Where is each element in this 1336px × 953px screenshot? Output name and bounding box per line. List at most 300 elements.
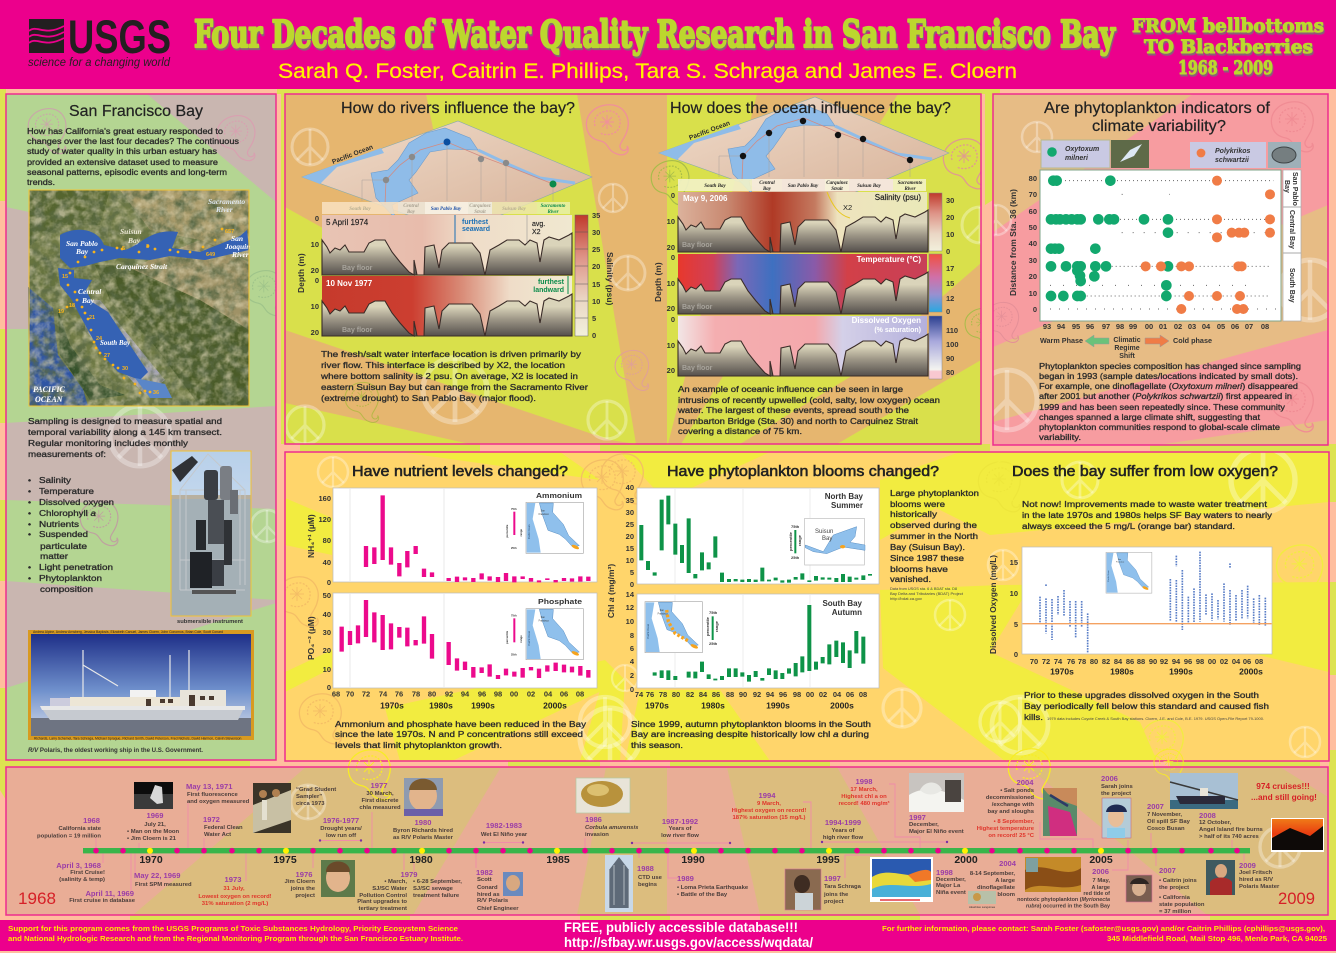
timeline axis [83, 848, 1250, 866]
event: 2006 red tide: rubra) occurred in the South Bay [1026, 904, 1110, 910]
event: April 11 1969 [69, 889, 136, 904]
bloom axis labels: 00 [806, 690, 814, 699]
bloom axis labels: 78 [659, 690, 667, 699]
ocean station labels: Sacramento [898, 181, 923, 186]
heading: climate variability? [1092, 118, 1226, 135]
sampling text: Regular monitoring includes monthly [28, 438, 189, 448]
event: 1989: • Battle of the Bay [677, 892, 728, 898]
section chart: dissolved oxygen: (% saturation) [874, 327, 921, 334]
event: 1988 CTD: begins [638, 882, 658, 888]
event: 1994-1999: Years of [832, 828, 854, 834]
event: 1998 March: 1998 [856, 777, 872, 786]
photo: R/V Polaris: Richards, Larry Schemel, Tara Schraga, Michael Sprague, Richard Smith, David Peterson, Fred Nichols, David Harmon, Calvin Stevenson [34, 736, 242, 740]
nutrient axis labels: 78 [412, 690, 420, 698]
river station labels: River [547, 210, 559, 215]
nutrient axis labels: 08 [576, 690, 584, 698]
event: 1979: Plant upgrades to [357, 899, 407, 905]
ocean text: covering a distance of 75 km. [678, 426, 802, 436]
event: 1972: 1972 [203, 815, 220, 824]
event: 1979: tertiary treatment [359, 906, 407, 912]
ocean depth axis: 0 [671, 315, 675, 324]
sampling text: measurements of: [28, 449, 106, 459]
oxygen lower text: Bay periodically fell below this standard and caused fish [1024, 701, 1269, 711]
phytoplankton text: phytoplankton communities respond to global-scale climate [1039, 422, 1280, 432]
bar chart: North Bay summer: 10 [626, 556, 634, 565]
river text: The fresh/salt water interface location is driven primarily by [321, 349, 582, 359]
ocean colour bars: 100 [946, 340, 959, 349]
bloom axis labels: 96 [779, 690, 787, 699]
dot chart axes: 40 [1029, 239, 1037, 248]
heading: Have phytoplankton blooms changed? [667, 464, 939, 480]
bloom axis labels: 02 [819, 690, 827, 699]
bar chart: North Bay summer: Suisun [815, 529, 833, 535]
monitoring list: Phytoplankton [39, 573, 102, 583]
event: 1989: • Loma Prieta Earthquake [677, 885, 749, 891]
event: 1973 [198, 875, 272, 907]
ocean depth axis [653, 191, 675, 375]
bloom side text: http://bdat.ca.gov [890, 597, 922, 601]
bar chart: phosphate: 20 [323, 646, 331, 655]
nutrient text: levels that limit phytoplankton growth. [335, 740, 502, 750]
event: 2009 Joel Fritsch [1206, 860, 1280, 895]
salinity colour bar: 10 [592, 297, 600, 306]
bloom side text: observed during the [890, 520, 977, 530]
timeline axis: 1985 [546, 854, 570, 866]
event: 1968 population: 1968 [83, 816, 100, 825]
bay region key [1283, 170, 1301, 321]
nutrient axis labels: 74 [379, 690, 388, 698]
scatter chart: dissolved oxygen: 92 [1160, 657, 1168, 666]
satellite map: 5 [122, 246, 125, 252]
section chart: salinity May 9 2006: Salinity (psu) [875, 193, 921, 202]
bar chart: North Bay summer: 25th [791, 555, 800, 560]
callout: cruises: ...and still going! [1251, 792, 1317, 802]
heading: San Francisco Bay [69, 103, 203, 120]
event: 1980 Byron Richards: 1980 [415, 818, 431, 827]
event: 2004 salt ponds: Highest temperature [977, 826, 1035, 832]
bloom axis labels [606, 564, 867, 710]
phytoplankton text [1039, 361, 1301, 442]
ocean text: Dumbarton Bridge (Sta. 30) and north to Carquinez Strait [678, 416, 919, 426]
bar chart: South Bay autumn: 6 [630, 644, 634, 653]
ocean text: An example of oceanic influence can be seen in large [678, 384, 903, 394]
bar chart: North Bay summer: 15 [626, 544, 634, 553]
bloom side text: blooms were [890, 499, 945, 509]
dot chart axes: 80 [1029, 174, 1037, 183]
bloom axis labels: 1990s [766, 700, 790, 710]
monitoring list: • [28, 573, 31, 583]
depth axis [296, 214, 319, 337]
satellite map: 24 [96, 336, 103, 342]
event: 1979 [357, 870, 462, 912]
bar chart: North Bay summer: 5 [630, 568, 634, 577]
ocean colour bars [929, 193, 959, 379]
climatic regime arrows: Cold phase [1173, 338, 1212, 345]
nutrient axis labels: 96 [478, 690, 486, 698]
event: 1968 population: population = 19 million [37, 834, 101, 840]
bar chart: South Bay autumn [626, 590, 879, 694]
bar chart: North Bay summer: North Bay [825, 492, 864, 501]
dot chart axes: 07 [1245, 322, 1253, 331]
event: April 3 1968: First Cruise! [70, 870, 105, 876]
event: May 13 1971 [186, 782, 250, 805]
event: 2007 Caitrin: the project [1159, 885, 1189, 891]
event: 2008 [1170, 773, 1264, 840]
phytoplankton text: after 2001 but another ( Polykrikos schwartzii ) first appeared in [1039, 391, 1292, 401]
scatter chart: dissolved oxygen [988, 547, 1272, 676]
bar chart: South Bay autumn: 75th [709, 610, 718, 615]
monitoring list [28, 475, 114, 594]
bar chart: phosphate [306, 591, 597, 692]
climatic regime arrows: Warm Phase [1040, 338, 1083, 345]
bloom axis labels: 06 [846, 690, 854, 699]
bloom side text: Data from USGS sta. 6 & BDAT sta. D8 [890, 587, 957, 591]
bloom axis labels: 82 [686, 690, 694, 699]
satellite map: River [231, 250, 249, 259]
scatter chart: dissolved oxygen: 80 [1090, 657, 1098, 666]
event: grad student sampler: circa 1973 [296, 801, 325, 807]
satellite map: 36 [153, 390, 159, 396]
monitoring list: composition [40, 584, 93, 594]
river station labels [322, 202, 570, 215]
satellite map: Bay [81, 296, 95, 305]
dot chart axes: 0 [1033, 305, 1037, 314]
event: May 22 1969: May 22, 1969 [134, 871, 180, 880]
climatic regime arrows: Shift [1119, 353, 1135, 360]
event: April 3 1968: April 3, 1968 [56, 861, 101, 870]
depth axis: 0 [315, 214, 319, 223]
nutrient axis labels: 06 [560, 690, 568, 698]
USGS logo [28, 10, 171, 69]
timeline axis: 1975 [273, 854, 297, 866]
ocean colour bars: 10 [946, 230, 954, 239]
salinity colour bar: 5 [592, 314, 596, 323]
dot chart axes: 50 [1029, 223, 1037, 232]
nutrient axis labels: 98 [494, 690, 502, 698]
event: 1977: First discrete [362, 798, 399, 804]
phytoplankton text: 1999 and has been seen repeatedly since. These community [1039, 402, 1286, 412]
nutrient axis labels: 2000s [543, 700, 567, 710]
section chart: 5 April 1974: seaward [462, 226, 490, 233]
salinity colour bar [575, 211, 615, 340]
nutrient axis labels [332, 690, 584, 710]
bar chart: South Bay autumn: 12 [626, 603, 634, 612]
event: 1969 moon [127, 782, 180, 842]
event: 1976-1977 drought: low run off [326, 833, 356, 839]
bar chart: South Bay autumn: South Bay [822, 599, 863, 608]
ocean station labels: San Pablo Bay [788, 184, 819, 189]
event: 2006 Sarah [1101, 774, 1133, 838]
phytoplankton text: began in 1993 (sample dates/locations indicated by small dots). [1039, 371, 1298, 381]
event: 1972 [203, 815, 243, 838]
river station labels: Strait [474, 210, 486, 215]
monitoring list: Suspended [39, 529, 88, 539]
scatter chart: dissolved oxygen: 76 [1067, 657, 1075, 666]
event: 1982-1983 [481, 821, 528, 838]
event: 2009 Joel Fritsch: hired as R/V [1239, 877, 1273, 883]
event: 1987-1992: 1987-1992 [662, 817, 698, 826]
event: 2006 Sarah: the project [1101, 791, 1131, 797]
event: 2008: 12 October, [1199, 820, 1231, 826]
bar chart: ammonium [306, 488, 597, 587]
event: 1980 Byron Richards: Byron Richards hired [393, 828, 453, 834]
monitoring list: • [28, 486, 31, 496]
river text: (extreme drought) to San Pablo Bay (major flood). [321, 393, 536, 403]
timeline axis: 2005 [1089, 854, 1113, 866]
ocean colour bars: 80 [946, 368, 954, 377]
event: 1998 December: 1998 [936, 868, 953, 877]
ocean depth axis: 10 [667, 217, 675, 226]
river text: eastern Suisun Bay but can range from the Sacramento River [321, 382, 588, 392]
authors: Sarah Q. Foster, Caitrin E. Phillips, Tara S. Schraga and James E. Cloern [278, 59, 1017, 83]
bar chart: ammonium: 0 [327, 578, 331, 587]
subtitle badge: TO Blackberries [1144, 36, 1313, 58]
monitoring list: Salinity [39, 475, 72, 485]
event: 1982 Scott Conard: hired as [477, 892, 500, 898]
scatter chart: dissolved oxygen: 08 [1255, 657, 1263, 666]
event: 1976 Jim Cloern [285, 860, 355, 899]
satellite map: Suisun [120, 227, 142, 236]
bloom side text: summer in the North [890, 531, 978, 541]
dot chart axes: 02 [1174, 322, 1182, 331]
phytoplankton text: For example, one dinoflagellate ( Oxytoxum milneri ) disappeared [1039, 381, 1298, 391]
bar chart: South Bay autumn: range [714, 620, 719, 632]
event: 1979: 1979 [401, 870, 417, 879]
dot chart axes: 00 [1145, 322, 1153, 331]
scatter chart: dissolved oxygen: 10 [1010, 589, 1018, 598]
bloom axis labels: 86 [712, 690, 720, 699]
bar chart: South Bay autumn: Autumn [832, 608, 862, 617]
salinity colour bar: 30 [592, 228, 600, 237]
river text: where bottom salinity is 2 psu. On average, X2 is located in [320, 371, 578, 381]
river station map: Pacific Ocean [331, 144, 374, 166]
event: 2004 salt ponds: on record! 25 °C [988, 833, 1035, 839]
satellite map: 30 [122, 366, 128, 372]
event: 1973: 31 July, [223, 886, 245, 892]
dot chart axes: 94 [1057, 322, 1066, 331]
event: May 13 1971: May 13, 1971 [186, 782, 233, 791]
photo: R/V Polaris: Andrea Alpine, Andrew Arnsberg, Jessica Baylosis, Elizabeth Canuel, James Cloern, John Conomos, Brian Cole, Scott Conard [33, 630, 223, 634]
ocean station map: Pacific Ocean [688, 120, 731, 142]
event: 2007 Caitrin: 2007 [1159, 866, 1176, 875]
event: May 13 1971: First fluorescence [187, 792, 238, 798]
event: 1976-1977 drought [320, 816, 362, 839]
phytoplankton text: Phytoplankton species composition has changed since sampling [1039, 361, 1301, 371]
bar chart: phosphate: 10 [323, 665, 331, 674]
ocean station map [659, 97, 949, 209]
salinity colour bar: 0 [592, 331, 596, 340]
event: 1997 December: Major El Niño event [909, 829, 964, 835]
bloom text: Bay are increasing despite historically low chl a during [631, 729, 869, 739]
scatter chart: dissolved oxygen: 04 [1232, 657, 1241, 666]
ocean text [677, 384, 940, 436]
bar chart: South Bay autumn: percentile [705, 616, 710, 636]
dot chart axes: 70 [1029, 190, 1037, 199]
scatter chart: dissolved oxygen: 84 [1114, 657, 1123, 666]
dot chart axes: 10 [1029, 289, 1037, 298]
depth axis: 0 [315, 276, 319, 285]
scatter chart: dissolved oxygen: 88 [1137, 657, 1145, 666]
oxygen lower text [1024, 690, 1269, 722]
dot chart axes: 30 [1029, 256, 1037, 265]
event: 1982-1983: 1982-1983 [486, 821, 522, 830]
bloom axis labels: 90 [739, 690, 747, 699]
intro text: changes over the last four decades? The continuous [27, 136, 240, 146]
event: 2009 Joel Fritsch: Joel Fritsch [1239, 870, 1272, 876]
event: 2007 Cosco Busan: Cosco Busan [1147, 826, 1185, 832]
database link: http://sfbay.wr.usgs.gov/access/wqdata/ [564, 935, 813, 950]
nutrient axis labels: 94 [461, 690, 470, 698]
monitoring list: matter [40, 551, 68, 561]
legend: Polykrikos schwartzii: Polykrikos [1215, 148, 1251, 155]
nutrient axis labels: 1970s [380, 700, 404, 710]
satellite map: OCEAN [35, 395, 64, 404]
bar chart: South Bay autumn: 0 [630, 685, 634, 694]
panel: nutrients, blooms, oxygen [276, 448, 1329, 770]
timeline range markers [319, 839, 948, 844]
dot chart axes: Distance from Sta. 36 (km) [1008, 189, 1018, 296]
satellite map: San Pablo [66, 239, 98, 248]
bloom text: Since 1999, autumn phytoplankton blooms in the South [631, 719, 871, 729]
event: 1973: Lowest oxygen on record! [198, 894, 272, 900]
scatter chart: dissolved oxygen: 86 [1126, 657, 1134, 666]
event: 1982 Scott Conard [476, 868, 523, 912]
scatter chart: dissolved oxygen: 02 [1220, 657, 1228, 666]
bloom side text: Bay Delta and Tributaries (BDAT) Project [890, 592, 963, 596]
event: 1994 [732, 791, 806, 821]
event: 1979: SJ/SC sewage [413, 886, 454, 892]
climatic regime arrows [1040, 335, 1212, 360]
intro text: How has California's great estuary responded to [27, 126, 223, 136]
depth axis: 10 [311, 240, 319, 249]
salinity colour bar: 25 [592, 245, 600, 254]
bloom side text: vanished. [890, 574, 931, 584]
dot chart axes: 04 [1202, 322, 1211, 331]
scatter chart: dissolved oxygen: 5 [1014, 620, 1018, 629]
event: 2006 red tide: 7 May, [1092, 878, 1110, 884]
bar chart: South Bay autumn: 14 [626, 590, 635, 599]
event: 1988 CTD: CTD use [638, 875, 663, 881]
ocean colour bars: 30 [946, 196, 954, 205]
bar chart: phosphate: 40 [323, 610, 331, 619]
ocean colour bars: 20 [946, 213, 954, 222]
dot chart axes: 93 [1043, 322, 1051, 331]
event: 1986 Corbula: 1986 [585, 815, 602, 824]
bar chart: North Bay summer: 40 [626, 483, 634, 492]
dot chart axes: 95 [1072, 322, 1080, 331]
scatter chart: dissolved oxygen: 82 [1102, 657, 1110, 666]
funding note: and National Hydrologic Research and from the Regional Monitoring Program through the San Francisco Estuary Institute. [8, 934, 463, 943]
ocean station labels: Bay [762, 187, 772, 192]
event: 1979: treatment failure [413, 893, 460, 899]
section chart: 10 Nov 1977: 10 Nov 1977 [326, 279, 373, 288]
bloom side text [890, 488, 979, 601]
event: 1980 Byron Richards: as R/V Polaris Master [393, 835, 454, 841]
scatter chart: dissolved oxygen: 70 [1030, 657, 1038, 666]
section chart: 5 April 1974: 5 April 1974 [326, 218, 369, 227]
oxygen lower text: Prior to these upgrades dissolved oxygen in the South [1024, 690, 1259, 700]
section chart: temperature: Bay floor [682, 304, 713, 311]
oxygen lower text: kills. [1024, 712, 1043, 722]
section chart: 5 April 1974 [322, 215, 572, 275]
legend: Polykrikos schwartzii: schwartzii [1215, 157, 1250, 164]
bar chart: South Bay autumn: 2 [630, 671, 634, 680]
ocean station labels: Carquinez [826, 181, 848, 186]
bloom axis labels: 74 [635, 690, 644, 699]
bloom axis labels: 80 [672, 690, 680, 699]
heading: How do rivers influence the bay? [341, 100, 575, 117]
event: 1998 March: 17 March, [850, 787, 878, 793]
timeline end year: 2009 [1278, 889, 1315, 908]
event: 2004 salt ponds: decommissioned [986, 795, 1034, 801]
bar chart: ammonium: 80 [323, 536, 331, 545]
scatter chart: dissolved oxygen: 06 [1243, 657, 1251, 666]
bar chart: North Bay summer: Summer [831, 501, 863, 510]
event: 2007 Caitrin: = 37 million [1159, 909, 1192, 915]
nutrient axis labels: 70 [346, 690, 354, 698]
event: 1976-1977 drought: 1976-1977 [323, 816, 359, 825]
dot chart axes: 96 [1086, 322, 1094, 331]
contact note: 345 Middlefield Road, Mail Stop 496, Menlo Park, CA 94025 [1107, 934, 1327, 943]
sampling text [28, 416, 222, 459]
heading: How does the ocean influence the bay? [670, 100, 951, 117]
event: grad student sampler [253, 783, 336, 833]
section chart: salinity May 9 2006: May 9, 2006 [683, 194, 728, 203]
event: grad student sampler: Sampler” [296, 794, 322, 800]
event: 2004 bloom [968, 859, 1017, 909]
event: 1998 March [838, 777, 890, 807]
bar chart: North Bay summer: 30 [626, 508, 634, 517]
nutrient axis labels: 00 [510, 690, 518, 698]
event: 1997 December [909, 773, 964, 835]
ocean depth axis: 10 [667, 279, 675, 288]
event: 1969 moon: • Man on the Moon [127, 829, 180, 835]
bar chart: North Bay summer: 75th [791, 524, 800, 529]
contact note [882, 924, 1327, 943]
event: 1980 Byron Richards [393, 778, 454, 841]
timeline axis: 1995 [816, 854, 840, 866]
monitoring list: • [28, 519, 31, 529]
event: 2007 Caitrin: • California [1159, 895, 1191, 901]
ocean station labels: Central [759, 181, 775, 186]
photo: R/V Polaris [28, 630, 254, 740]
nutrient axis labels: 80 [428, 690, 436, 698]
sampling text: temporal variability along a 145 km transect. [28, 427, 222, 437]
event: 1973: 1973 [225, 875, 241, 884]
nutrient axis labels: 1990s [471, 700, 495, 710]
bloom axis labels: 84 [699, 690, 708, 699]
legend: Oxytoxum milneri: Oxytoxum [1065, 146, 1099, 153]
legend: Oxytoxum milneri [1041, 140, 1149, 168]
satellite map: 8 [146, 244, 149, 250]
database link: FREE, publicly accessible database!!! [564, 920, 798, 935]
event: 1997 Tara Schraga: joins the [823, 892, 849, 898]
callout: cruises: 974 cruises!!! [1256, 781, 1310, 791]
bloom text [631, 719, 871, 750]
bloom axis labels: Chl a (mg/m³) [606, 564, 616, 618]
scatter chart: dissolved oxygen: 90 [1149, 657, 1157, 666]
nutrient axis labels: 68 [332, 690, 340, 698]
nutrient text [335, 719, 587, 750]
bay region key: San Pablo [1291, 172, 1298, 206]
event: May 13 1971: and oxygen measured [187, 799, 250, 805]
nutrient axis labels: 04 [544, 690, 553, 698]
dot chart axes: 97 [1102, 322, 1110, 331]
event: grad student sampler: “Grad Student [296, 787, 336, 793]
event: 1968 population: California state [58, 826, 102, 832]
event: 1982 Scott Conard: 1982 [476, 868, 493, 877]
funding note: Support for this program comes from the USGS Programs of Toxic Substances Hydrology, Priority Ecosystem Science [8, 924, 458, 933]
